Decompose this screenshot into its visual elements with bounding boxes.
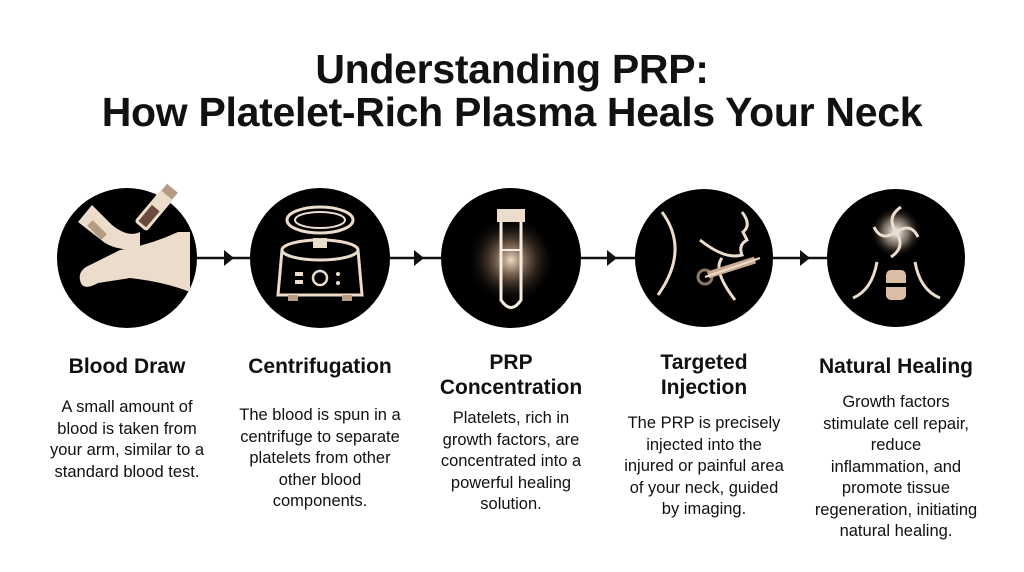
step 3 text: Platelets, rich in [453, 409, 569, 427]
step 5 text: Growth factors [842, 393, 950, 411]
step 1 text: A small amount of [61, 398, 193, 416]
step 4 text [624, 414, 784, 518]
icon: centrifuge [250, 188, 390, 328]
step 5 text: promote tissue [842, 479, 950, 497]
step 1 heading: Blood Draw [69, 355, 185, 378]
step 3 heading: Concentration [440, 376, 582, 399]
step 3 text: growth factors, are [443, 430, 579, 448]
step 4 text: by imaging. [662, 500, 746, 518]
step 2 text [239, 406, 401, 510]
title: Understanding PRP: [315, 46, 709, 92]
step 4 text: of your neck, guided [630, 478, 778, 496]
step 5 heading: Natural Healing [819, 355, 973, 378]
step 2 text: centrifuge to separate [240, 428, 400, 446]
step 5 text: regeneration, initiating [815, 500, 977, 518]
step 1 text: standard blood test. [55, 462, 199, 480]
step 1 text: blood is taken from [57, 420, 197, 438]
step 1 text: your arm, similar to a [50, 441, 204, 459]
icon: PRP tube [441, 188, 581, 328]
icon: blood draw [57, 183, 197, 328]
connector line [190, 250, 830, 266]
step 4 heading [660, 351, 748, 399]
step 3 text: solution. [480, 495, 542, 513]
step 3 text [441, 409, 582, 513]
step 3 text: concentrated into a [441, 452, 581, 470]
step 4 heading: Injection [661, 376, 747, 399]
icon: targeted injection [635, 189, 773, 327]
step 5 text: inflammation, and [831, 458, 961, 476]
step 3 heading [440, 351, 582, 399]
step 2 text: The blood is spun in a [239, 406, 401, 424]
step 2 text: components. [273, 492, 367, 510]
step 1 text [50, 398, 204, 480]
step 4 text: injured or painful area [624, 457, 784, 475]
step 5 text: stimulate cell repair, [823, 414, 969, 432]
step 2 heading: Centrifugation [248, 355, 392, 378]
step 4 heading: Targeted [660, 351, 748, 374]
process diagram [57, 184, 965, 328]
step 2 text: other blood [279, 470, 361, 488]
step 3 text: powerful healing [451, 474, 571, 492]
step 4 text: injected into the [646, 436, 762, 454]
step 5 text: reduce [871, 436, 921, 454]
step 4 text: The PRP is precisely [628, 414, 780, 432]
title: How Platelet-Rich Plasma Heals Your Neck [102, 89, 922, 135]
title [102, 46, 922, 135]
step 5 text [815, 393, 977, 540]
step 5 text: natural healing. [840, 522, 952, 540]
icon: natural healing [827, 189, 965, 327]
step 2 text: platelets from other [249, 449, 391, 467]
step 3 heading: PRP [489, 351, 533, 374]
